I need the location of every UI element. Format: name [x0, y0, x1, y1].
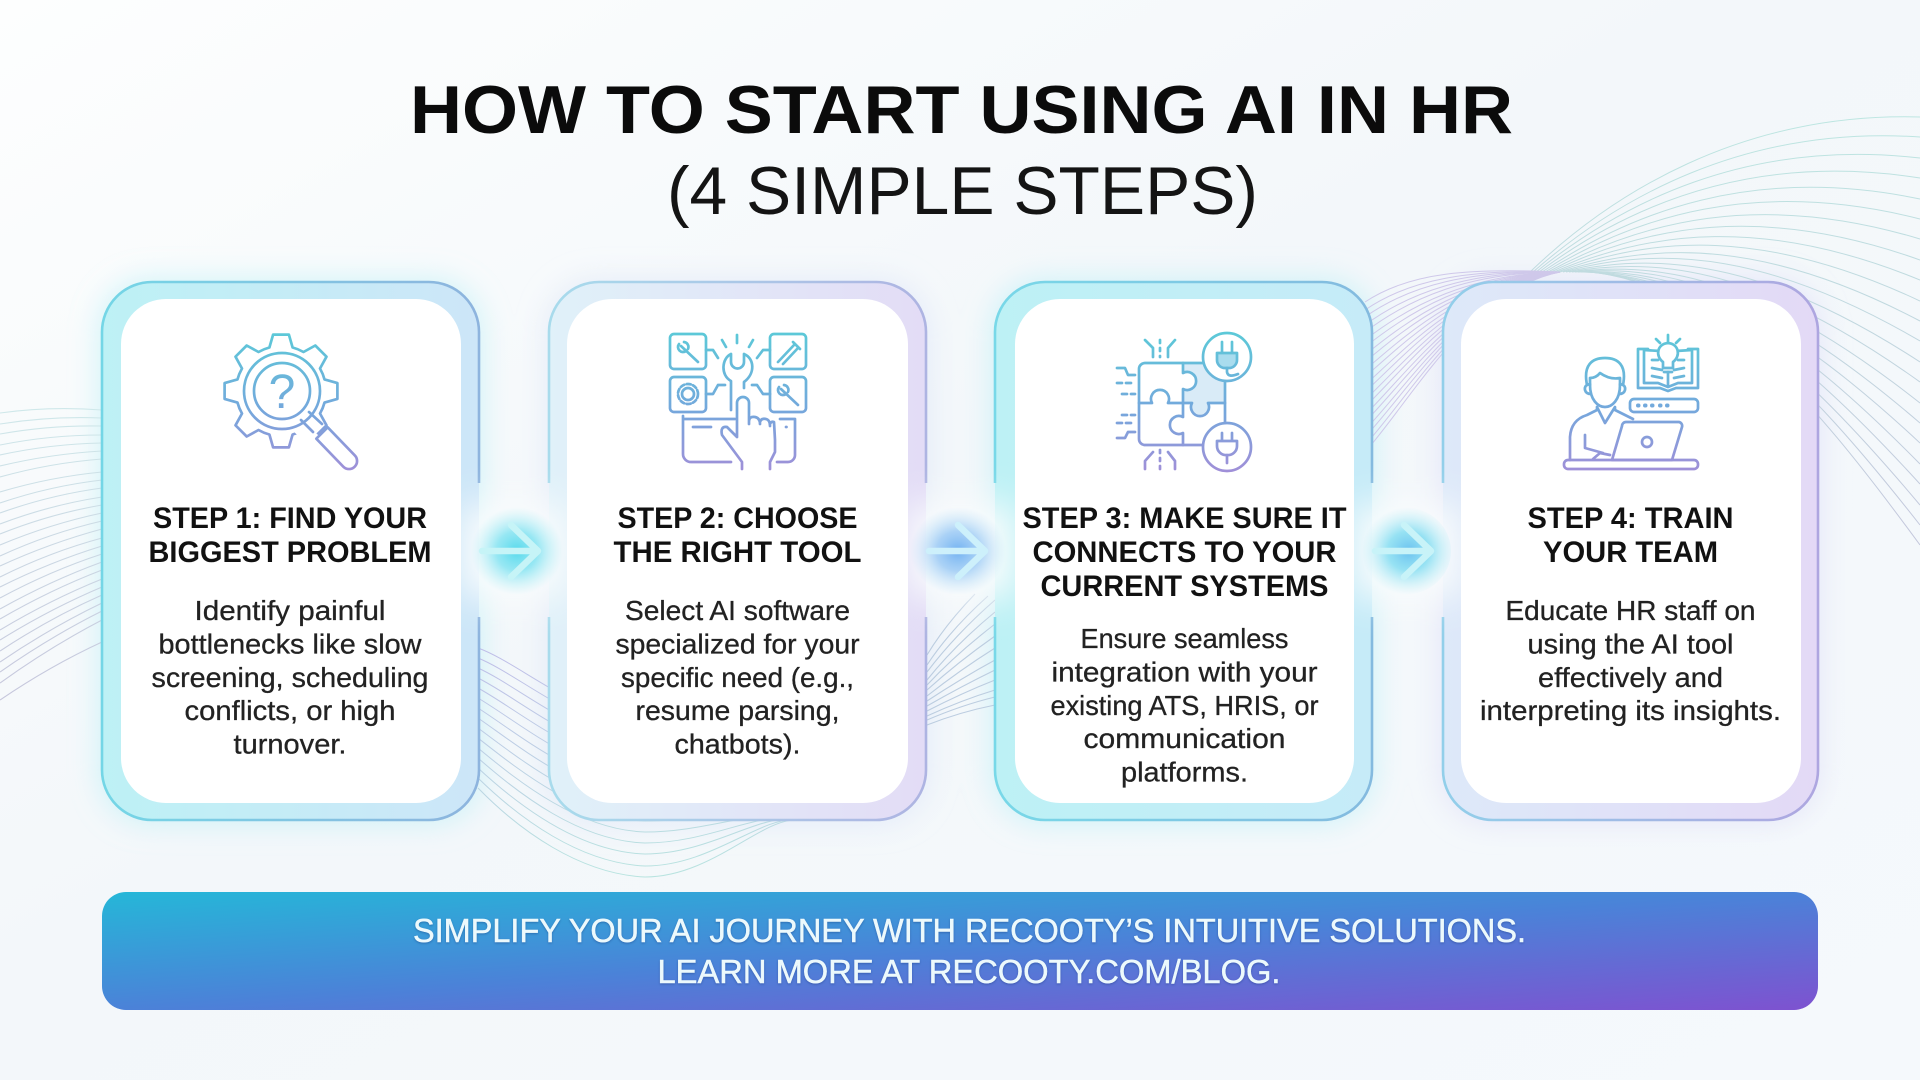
icon: gear with magnifying glass: ? [269, 366, 295, 419]
heading: step 1: BIGGEST PROBLEM [148, 536, 432, 569]
text: step 2 description: resume parsing, [636, 695, 840, 726]
text: step 2 description: specialized for your [616, 628, 860, 660]
text: step 2 description: Select AI software [625, 595, 850, 626]
heading: step 2: THE RIGHT TOOL [614, 536, 862, 569]
text: step 4 description: Educate HR staff on [1506, 595, 1756, 626]
text: step 4 description [1480, 595, 1781, 726]
wave lines: lower middle [478, 648, 795, 877]
heading: step 3: CONNECTS TO YOUR [1032, 536, 1336, 569]
panel: step 4 [1443, 282, 1818, 820]
text: step 2 description: specific need (e.g., [621, 662, 854, 693]
icon: tools with pointing hand [670, 334, 806, 469]
text: step 2 description [616, 595, 860, 760]
wave lines: gap between cards 3 and 4 [1365, 271, 1560, 452]
heading: step 4 [1528, 502, 1734, 569]
arrow: step 2 to step 3 [914, 511, 1002, 592]
banner: call to action: SIMPLIFY YOUR AI JOURNEY WITH RECOOTY’S INTUITIVE SOLUTIONS. [413, 912, 1526, 949]
card outer glows [98, 278, 1822, 824]
title: HOW TO START USING AI IN HR [410, 72, 1513, 148]
text: step 3 description: communication [1084, 723, 1286, 754]
icon: person with laptop and book [1564, 335, 1698, 469]
wave lines: gap between cards 2 and 3 [927, 594, 995, 725]
text: step 3 description: platforms. [1121, 756, 1248, 788]
text: step 1 description: bottlenecks like slow [158, 628, 422, 660]
text: step 3 description: Ensure seamless [1080, 623, 1288, 654]
text: step 1 description: Identify painful [194, 595, 386, 626]
text: step 2 description: chatbots). [674, 728, 800, 760]
text: step 4 description: interpreting its insights. [1480, 695, 1781, 726]
text: step 3 description: integration with your [1052, 656, 1318, 688]
heading: step 4: YOUR TEAM [1543, 536, 1718, 569]
heading: step 4: STEP 4: TRAIN [1528, 502, 1734, 535]
arrow: step 1 to step 2 [474, 510, 560, 592]
wave lines: left [0, 409, 102, 700]
arrow: step 3 to step 4 [1366, 510, 1451, 592]
text: step 3 description: existing ATS, HRIS, or [1050, 690, 1318, 721]
heading: step 3: CURRENT SYSTEMS [1040, 570, 1328, 603]
title [410, 72, 1513, 229]
text: step 1 description: screening, scheduling [152, 662, 428, 693]
heading: step 1: STEP 1: FIND YOUR [153, 502, 427, 535]
text: step 3 description [1050, 623, 1318, 788]
icon: gear with magnifying glass [225, 335, 357, 469]
text: step 4 description: effectively and [1538, 662, 1723, 693]
banner: call to action [102, 892, 1818, 1010]
panel: step 3 [995, 282, 1372, 820]
heading: step 3 [1022, 502, 1346, 603]
panel: step 1 [102, 282, 479, 820]
title: (4 SIMPLE STEPS) [667, 153, 1258, 229]
panel: step 2 [549, 282, 926, 820]
wave lines: upper right [1530, 117, 1920, 545]
text: step 1 description [152, 595, 428, 760]
text: step 1 description: turnover. [234, 728, 346, 760]
gap fades between cards [461, 505, 1461, 597]
heading: step 3: STEP 3: MAKE SURE IT [1022, 502, 1346, 535]
heading: step 1 [148, 502, 432, 569]
heading: step 2 [614, 502, 862, 569]
icon: puzzle with plugs [1117, 333, 1251, 471]
text: step 1 description: conflicts, or high [184, 695, 396, 726]
banner: call to action: LEARN MORE AT RECOOTY.COM/BLOG. [658, 953, 1280, 990]
text: step 4 description: using the AI tool [1528, 628, 1734, 660]
heading: step 2: STEP 2: CHOOSE [618, 502, 858, 535]
